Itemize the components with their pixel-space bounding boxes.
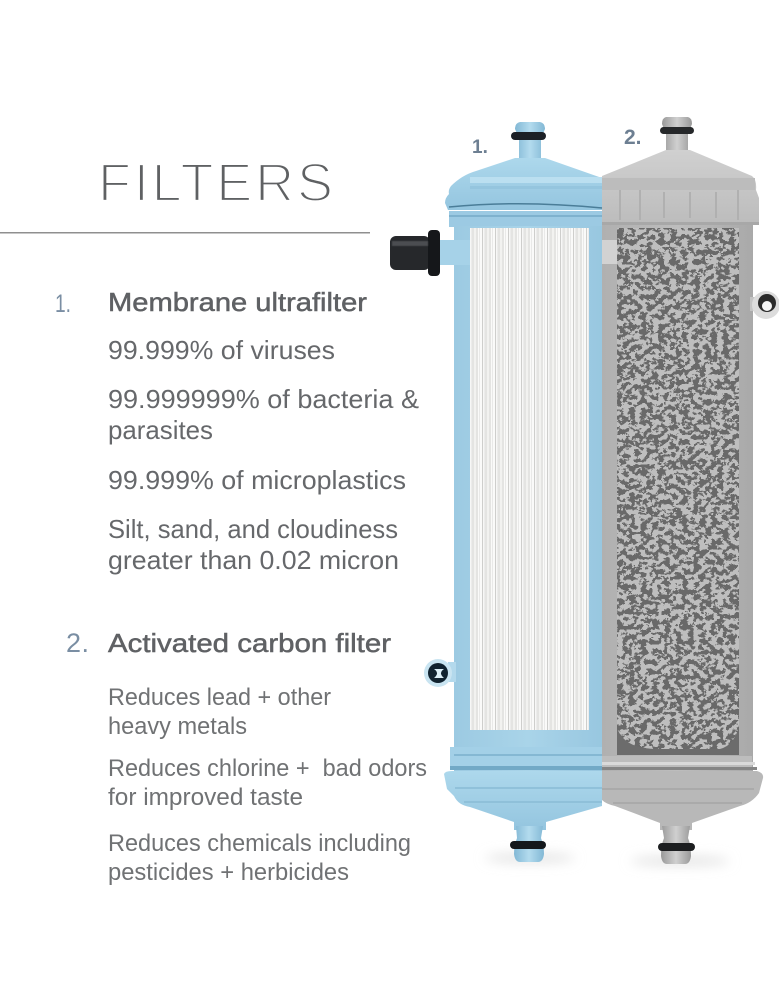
list: membrane ultrafilter removals: 99.999% of microplastics: [108, 465, 406, 495]
carbon media: [617, 228, 739, 756]
list: carbon filter reductions: for improved taste: [108, 784, 303, 811]
number 2: 2.: [66, 628, 89, 658]
list: carbon filter reductions: Reduces chlorine + bad odors: [108, 755, 427, 782]
blue body: [454, 226, 602, 778]
list: carbon filter reductions: [108, 684, 427, 886]
panel: activated carbon text: [66, 628, 427, 886]
list: membrane ultrafilter removals: [108, 335, 419, 575]
floor shadow: [485, 854, 730, 865]
list: carbon filter reductions: pesticides + herbicides: [108, 859, 349, 886]
heading: activated carbon filter: Activated carbon filter: [108, 628, 391, 658]
list: carbon filter reductions: Reduces lead + other: [108, 684, 331, 711]
blue filter 1: membrane ultrafilter: [390, 122, 602, 862]
blue base: [444, 747, 602, 830]
gray filter 2: activated carbon: [602, 117, 779, 864]
icon: gray top nozzle: [660, 117, 694, 150]
icon: blue side port: [424, 659, 456, 687]
hollow fibre membrane: [470, 228, 589, 730]
list: carbon filter reductions: Reduces chemicals including: [108, 830, 411, 857]
gray cap: [602, 150, 759, 225]
list: carbon filter reductions: heavy metals: [108, 713, 247, 740]
list: membrane ultrafilter removals: parasites: [108, 415, 213, 445]
list: membrane ultrafilter removals: greater than 0.02 micron: [108, 545, 399, 575]
icon: black inlet connector: [390, 230, 470, 276]
icon: gray side port: [750, 291, 779, 319]
icon: blue top nozzle: [511, 122, 546, 158]
blue cap: [445, 158, 602, 227]
icon: blue bottom nozzle: [510, 826, 546, 862]
heading: membrane ultrafilter: Membrane ultrafilter: [108, 287, 367, 317]
label 1: 1.: [472, 137, 488, 158]
title: FILTERS: [98, 153, 333, 213]
title rule: [0, 232, 370, 234]
panel: membrane ultrafilter text: [55, 287, 419, 575]
list: membrane ultrafilter removals: Silt, sand, and cloudiness: [108, 514, 398, 544]
list: membrane ultrafilter removals: 99.999999% of bacteria &: [108, 384, 419, 414]
gray base: [602, 756, 763, 830]
icon: gray bottom nozzle: [658, 826, 695, 864]
gray body: [602, 225, 753, 775]
label 2: 2.: [624, 126, 642, 149]
gray left tube: [602, 240, 617, 264]
number 1: 1.: [55, 290, 71, 318]
list: membrane ultrafilter removals: 99.999% of viruses: [108, 335, 335, 365]
